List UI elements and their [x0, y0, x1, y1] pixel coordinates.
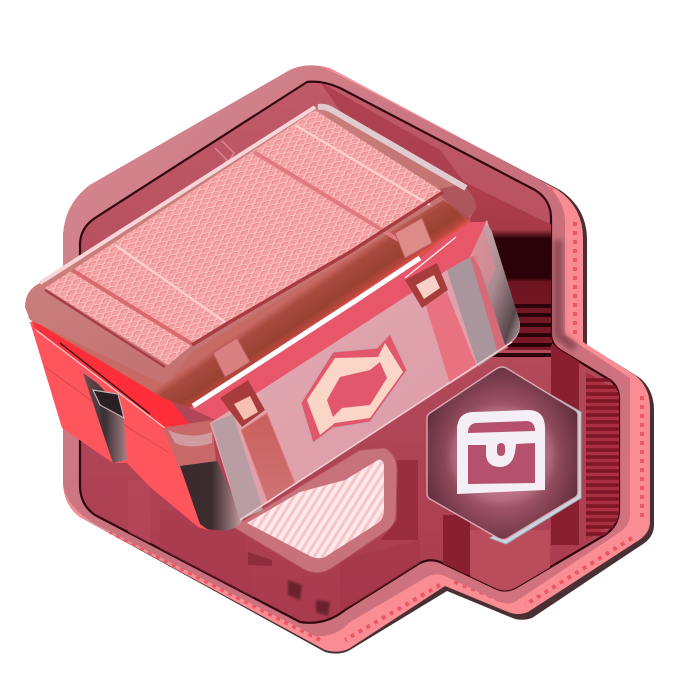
clasp left light: [234, 396, 258, 420]
top trace: [214, 140, 235, 162]
chest front face: [210, 220, 520, 520]
dark smudges: [288, 580, 302, 600]
front left red strap: [241, 413, 295, 503]
back wall stripes: [492, 304, 552, 357]
hexagon body: [427, 367, 578, 540]
circuit blocks near hexagon: [380, 460, 418, 540]
emblem: [301, 334, 407, 443]
chest body cutout: [468, 443, 535, 484]
lid top edge highlight: [40, 107, 315, 283]
chest dark corner: [180, 461, 243, 531]
right ribbed chamber: [586, 372, 620, 540]
thin slit right: [405, 237, 456, 278]
body clasp right: [405, 263, 448, 308]
chest glow: [450, 407, 554, 503]
front right thin strap: [470, 252, 508, 353]
white slit: [193, 258, 420, 406]
panel: hexagonal base plate: [63, 65, 654, 654]
chest lock slot: [497, 443, 505, 456]
lid top right glass highlight: [318, 107, 466, 188]
lid groove lines: [45, 125, 443, 367]
clasp left base: [220, 380, 265, 427]
rim band dark shading on the right: [558, 240, 575, 348]
lid right dark corner: [435, 184, 476, 220]
tray: striped window frame: [233, 448, 397, 573]
hexagon glass edge: [490, 367, 581, 544]
body clasp left: [220, 380, 265, 427]
top dark panel: [320, 82, 464, 182]
left side highlight line: [36, 330, 165, 428]
plate dark outer edge: [63, 66, 654, 654]
chest lid cutout: [468, 421, 535, 433]
lid clasp right: [395, 218, 432, 258]
plate strip dashes: [110, 84, 642, 640]
front right red strap: [425, 292, 477, 384]
tray frame: [233, 448, 397, 573]
latch buckle: [93, 390, 124, 418]
icon: treasure chest: [457, 410, 545, 494]
back wall compartment: [464, 182, 552, 350]
front wavy edge: [192, 192, 443, 345]
clasp right base: [405, 263, 448, 308]
emblem outer frame: [301, 334, 407, 443]
latch: [83, 373, 127, 463]
chest: [25, 106, 520, 531]
clasp right light: [416, 275, 440, 299]
lid woven surface: [45, 110, 443, 365]
right chamber ribs: [586, 380, 620, 534]
icon card: glass hexagon with chest: [427, 367, 581, 544]
lighter floor block: [470, 530, 550, 590]
lid front: [27, 150, 470, 408]
left side dark line: [60, 343, 150, 414]
plate rim band: [63, 65, 630, 636]
plate glowing pink strip: [63, 65, 650, 652]
plate interior details: [128, 82, 620, 640]
red band under slit: [190, 222, 486, 420]
front left dark edge: [45, 290, 165, 367]
front left grey strap: [212, 414, 263, 520]
chest corner band: [163, 420, 216, 470]
lid rim: [25, 106, 476, 384]
emblem inner pink: [327, 362, 387, 417]
latch strap: [83, 373, 127, 463]
dark groove right: [254, 152, 402, 242]
right column: [551, 345, 579, 545]
left bright red strip: [30, 316, 190, 427]
front glass corner: [478, 224, 520, 345]
faint left floor panels: [128, 531, 150, 544]
chest corner glass band: [168, 430, 212, 446]
dark groove left: [72, 270, 192, 344]
tray striped panel: [247, 460, 384, 558]
lid clasp left: [213, 338, 250, 377]
light groove right: [295, 125, 430, 205]
front right grey strap: [447, 257, 498, 367]
plate inner floor: [80, 82, 619, 623]
column under hexagon: [443, 515, 470, 575]
chest outline: [457, 410, 545, 494]
glass ring at corner: [470, 222, 496, 285]
light groove left: [115, 245, 225, 322]
chest left red side: [30, 322, 220, 530]
emblem peach chevrons: [307, 343, 403, 435]
front bottom edge highlight: [240, 342, 512, 520]
left side seam: [45, 367, 168, 452]
lower floor shadow: [342, 562, 420, 611]
illustration: loot chest on hexagonal plate: [25, 65, 654, 654]
